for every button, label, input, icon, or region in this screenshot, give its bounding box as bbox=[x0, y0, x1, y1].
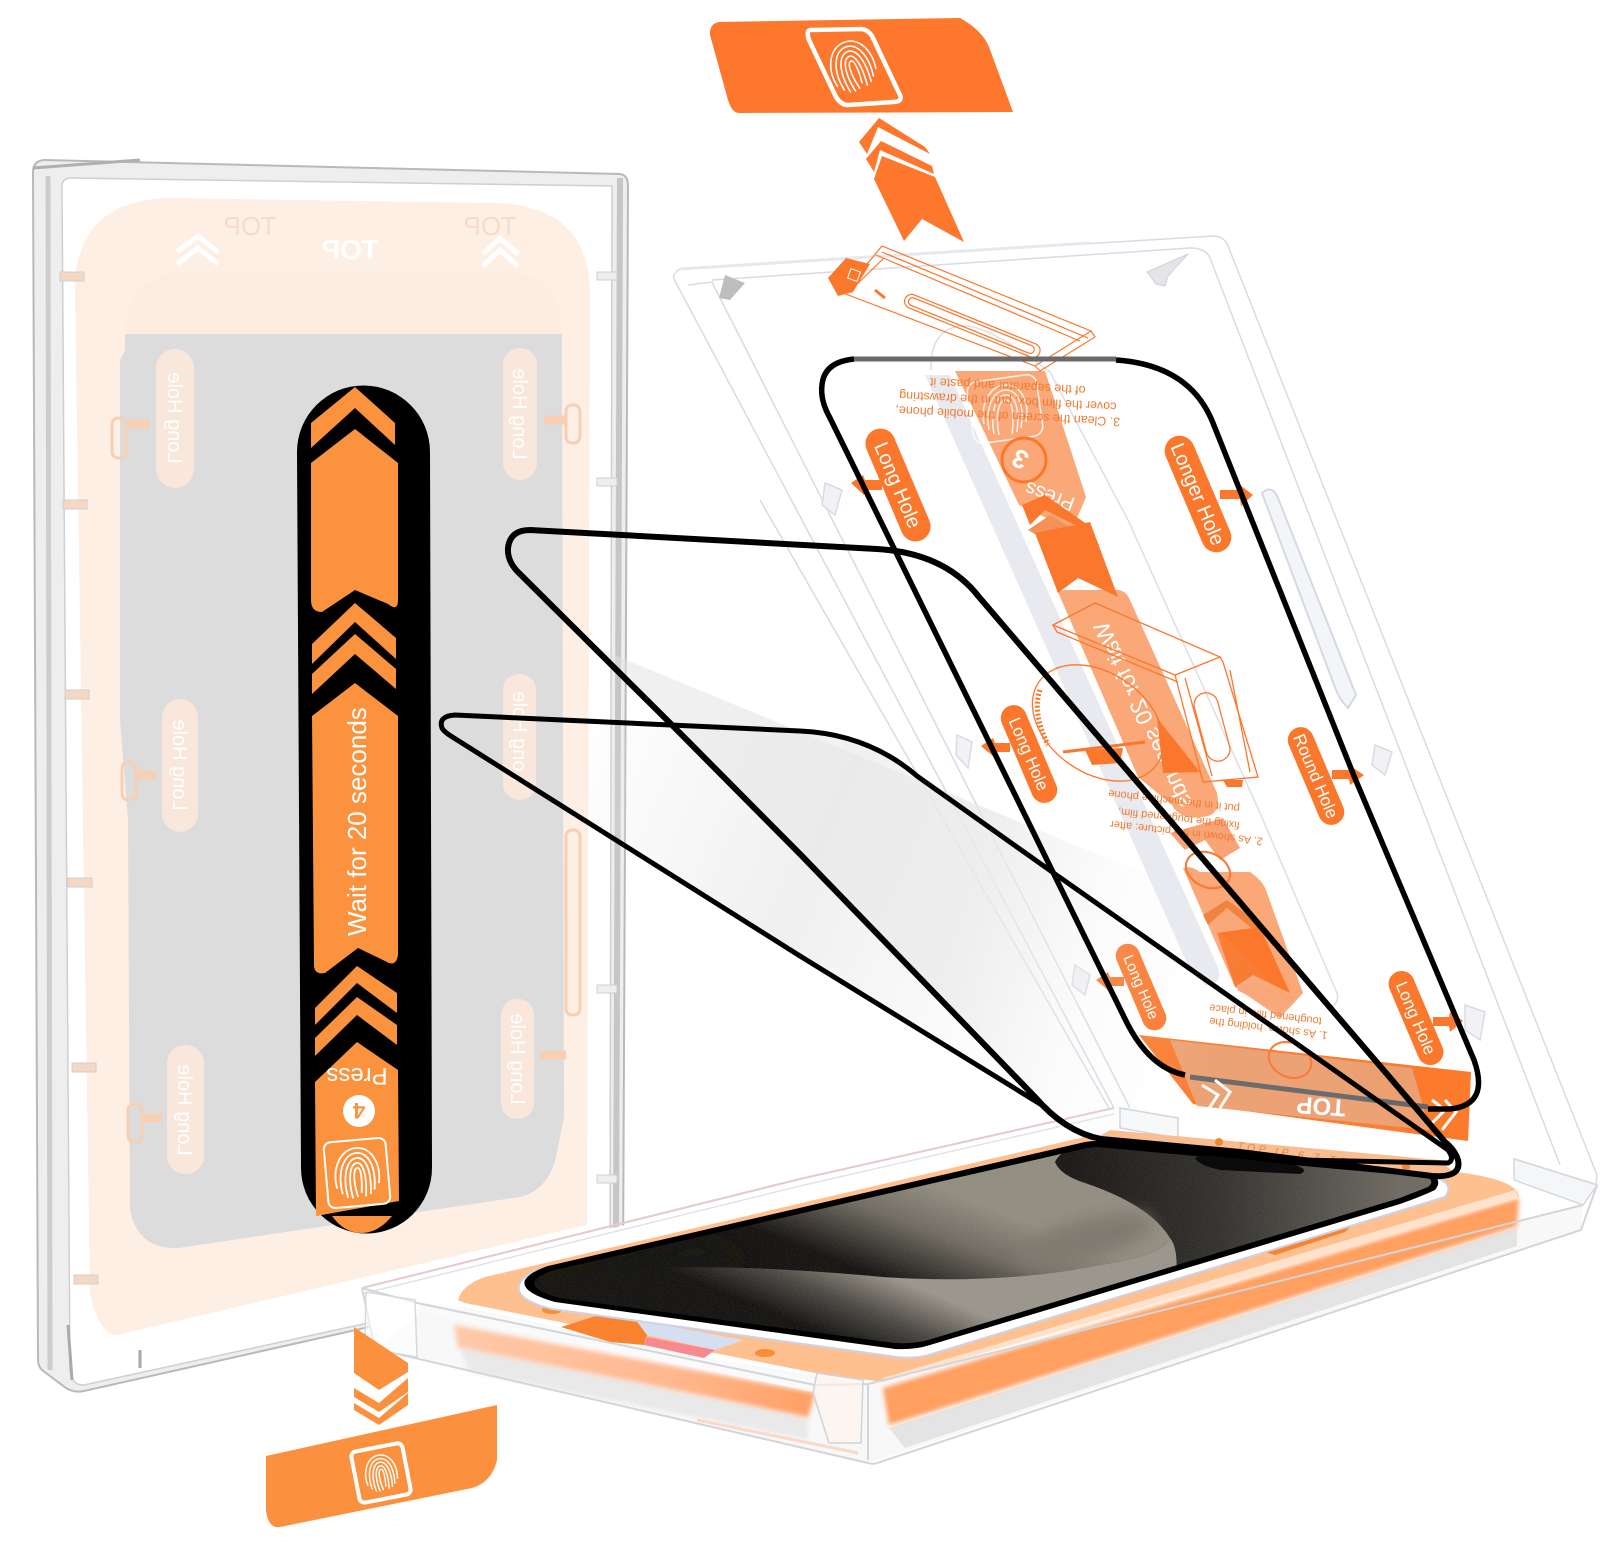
text block: step 1 instruction bbox=[1209, 1001, 1328, 1041]
label block 2 with wait text: Wait for 20 seconds bbox=[342, 707, 372, 936]
tray orange band front-right bbox=[883, 1198, 1519, 1425]
white chevrons right bbox=[483, 238, 518, 266]
chevron 2 bbox=[312, 603, 396, 664]
step 3 badge bbox=[1002, 438, 1046, 482]
label: long hole lower left bbox=[1112, 940, 1170, 1034]
inner film outline bbox=[931, 326, 1338, 1008]
text block: step 2 instruction bbox=[1108, 787, 1263, 847]
hinge clip front bbox=[813, 1373, 863, 1443]
hinge right bbox=[1514, 1159, 1597, 1205]
phone black bezel bbox=[524, 1141, 1438, 1349]
label: long hole upper left bbox=[861, 424, 935, 546]
panel: black pull strip with instructions bbox=[297, 386, 432, 1234]
arrows: hole pointers bbox=[851, 475, 1463, 1032]
TOP label on lid: TOP bbox=[1296, 1091, 1346, 1121]
arrow: top pull direction bbox=[859, 118, 964, 242]
chevron 3 bbox=[312, 634, 396, 694]
label: longer hole: Longer Hole bbox=[1166, 440, 1228, 549]
text block: step 3 instruction: of the separator and paste it bbox=[929, 375, 1086, 397]
label block 2 with wait text bbox=[312, 683, 398, 973]
bottom orange peek bbox=[332, 1216, 392, 1233]
long slot bbox=[1262, 489, 1356, 708]
plate lower-right lighter rim bbox=[883, 1190, 1519, 1382]
long hole pill top left: Long Hole bbox=[163, 372, 185, 464]
step 4 badge: 4 bbox=[352, 1098, 365, 1123]
text block: step 3 instruction: cover the film box, put in the drawstring bbox=[899, 388, 1117, 414]
label: long hole middle bbox=[997, 701, 1061, 807]
glass A top edge bbox=[854, 356, 1116, 362]
long hole pill middle left: Long Hole bbox=[168, 719, 190, 811]
stripe dark line bbox=[1190, 1077, 1428, 1107]
hinge clip left bbox=[365, 1292, 417, 1357]
icon: fingerprint box bbox=[323, 1137, 391, 1209]
long hole pill middle right: Long Hole bbox=[508, 691, 530, 783]
hinge back bbox=[1120, 1108, 1178, 1138]
longer hole pill bottom right: Long Hole bbox=[506, 1013, 528, 1105]
text block: step 2 instruction: fixing the toughened film, bbox=[1117, 805, 1240, 831]
text block: step 3 instruction: 3. Clean the screen of the mobile phone, bbox=[895, 403, 1121, 429]
tray notch: bright section bbox=[561, 1315, 647, 1345]
plate dots bbox=[542, 1306, 775, 1357]
wallpaper lower sweep bbox=[674, 1238, 1177, 1344]
step 3 fingerprint bbox=[966, 373, 1044, 445]
middle band bbox=[1058, 590, 1218, 818]
glass peach top strip with model text: TOP IP 6.7 TOP bbox=[1237, 1140, 1361, 1170]
chevrons left on stripe bbox=[1202, 1080, 1230, 1110]
tray white front rim bbox=[419, 1303, 815, 1392]
tray back edge bbox=[362, 1108, 1114, 1288]
panel: bottom tray bbox=[362, 1108, 1597, 1464]
tray glass side bbox=[376, 1205, 1583, 1463]
long hole pill top right bbox=[503, 348, 537, 480]
tray grey front-right band bbox=[889, 1228, 1517, 1448]
lower arrow bbox=[1203, 900, 1295, 1012]
label: long hole upper left: Long Hole bbox=[869, 439, 925, 532]
step 3 badge: 3 bbox=[1007, 443, 1033, 476]
glass sheet C: front protector bbox=[441, 715, 1452, 1163]
bottom stripe deep orange bbox=[1139, 1035, 1471, 1141]
long hole pill middle right bbox=[503, 674, 536, 800]
long hole pill bottom left: Long Hole bbox=[173, 1064, 195, 1156]
lid printed instruction strip: orange bands bbox=[955, 371, 1471, 1141]
ring on lower lid band bbox=[1180, 845, 1236, 895]
phone notch bbox=[1195, 1156, 1304, 1174]
long hole pill middle left bbox=[162, 699, 198, 832]
rail tabs bbox=[60, 272, 617, 1284]
grey film window bbox=[120, 334, 564, 1248]
line drawing: top machine bbox=[828, 246, 1095, 371]
text block: step 1 instruction: 1. As shown, holding the bbox=[1209, 1014, 1328, 1041]
tray base bbox=[362, 1108, 1597, 1464]
long hole pill bottom left bbox=[167, 1045, 204, 1174]
text block: step 2 instruction: 2. As shown in the picture: after bbox=[1109, 818, 1263, 847]
long hole pill top left bbox=[156, 349, 194, 488]
tray grey front-left band bbox=[458, 1345, 808, 1440]
wallpaper upper sweep bbox=[758, 1154, 1170, 1279]
lid clips bbox=[719, 275, 745, 300]
upper chevron pieces above ring bbox=[1170, 818, 1240, 860]
glass peach top strip with model text bbox=[1093, 1130, 1460, 1178]
label: long hole lower right: Long Hole bbox=[1392, 979, 1439, 1058]
press label: Press bbox=[326, 1062, 388, 1089]
label block 3 bbox=[315, 1042, 399, 1216]
panel: left closed applicator box bbox=[33, 160, 628, 1392]
inner peach step bbox=[125, 272, 562, 334]
label: long hole lower left: Long Hole bbox=[1119, 952, 1162, 1022]
chevron 5 bbox=[315, 997, 397, 1056]
icon: fingerprint bbox=[808, 29, 901, 105]
label: round hole bbox=[1284, 723, 1348, 829]
icon: fingerprint bbox=[351, 1443, 411, 1503]
side tabs and clips bbox=[112, 405, 580, 1142]
press label on lid: Press bbox=[1022, 477, 1078, 515]
panel: bottom pull tab bbox=[266, 1405, 497, 1527]
translucent film band bbox=[925, 375, 1219, 985]
wallpaper lit edge bbox=[1040, 1204, 1160, 1258]
label: long hole middle: Long Hole bbox=[1005, 715, 1052, 794]
panel: top pull tab bbox=[710, 18, 1013, 113]
label: long hole lower right bbox=[1384, 967, 1448, 1069]
lower band bbox=[1183, 867, 1303, 1018]
side button slot bbox=[1265, 1222, 1355, 1255]
white chevrons left bbox=[177, 236, 218, 264]
chevrons right on stripe bbox=[1430, 1100, 1456, 1130]
upper band bbox=[955, 371, 1086, 530]
glass sheet B: middle protector bbox=[508, 530, 1458, 1176]
tray notch: blue strip bbox=[636, 1320, 744, 1350]
longer hole pill bottom right bbox=[501, 999, 534, 1119]
panel: right tilted lid of applicator bbox=[674, 236, 1597, 1190]
phone silver frame bbox=[519, 1144, 1448, 1358]
tray orange band front-left bbox=[454, 1325, 815, 1417]
mirrored TOP label: TOP bbox=[321, 234, 379, 265]
text block: step 2 instruction: put it in the machine phone bbox=[1108, 787, 1240, 814]
tray outer edges bbox=[362, 1159, 1597, 1464]
long hole pill top right: Long Hole bbox=[508, 368, 530, 460]
phone bbox=[500, 1130, 1450, 1360]
lower pull arrow bbox=[354, 1327, 408, 1425]
label block 1 bbox=[311, 429, 398, 612]
faint TOP mark right: TOP bbox=[464, 211, 516, 241]
chevron 1 bbox=[311, 387, 395, 448]
chevron 4 bbox=[315, 966, 397, 1025]
line drawing: machine in use bbox=[1010, 603, 1258, 805]
tray peach edge line bbox=[697, 1420, 858, 1453]
tray notch: pink strip bbox=[644, 1337, 715, 1358]
glass sheet A: back protector on lid bbox=[822, 359, 1479, 1109]
wallpaper left shadow bbox=[530, 1235, 760, 1285]
upper chevrons and arrow bbox=[1022, 495, 1118, 597]
step 1 ring bbox=[1263, 1035, 1317, 1085]
step 4 badge bbox=[343, 1095, 375, 1127]
faint TOP mark left: TOP bbox=[224, 211, 276, 241]
mirrored wait text: Wait for 20 seconds bbox=[1088, 618, 1197, 812]
tab on machine bbox=[828, 258, 870, 296]
label: round hole: Round Hole bbox=[1289, 731, 1342, 821]
phone wallpaper bbox=[534, 1147, 1432, 1344]
peach silicone frame bbox=[75, 198, 590, 1335]
glass tints: sheets B and C bbox=[441, 645, 1452, 1163]
text block: step 3 instruction bbox=[895, 375, 1121, 429]
tray plate bbox=[458, 1135, 1519, 1382]
text block: step 1 instruction: toughened film in place bbox=[1209, 1001, 1322, 1027]
wallpaper speckle bbox=[534, 1147, 1431, 1343]
bottom stripe light film overlay bbox=[1170, 1040, 1430, 1130]
